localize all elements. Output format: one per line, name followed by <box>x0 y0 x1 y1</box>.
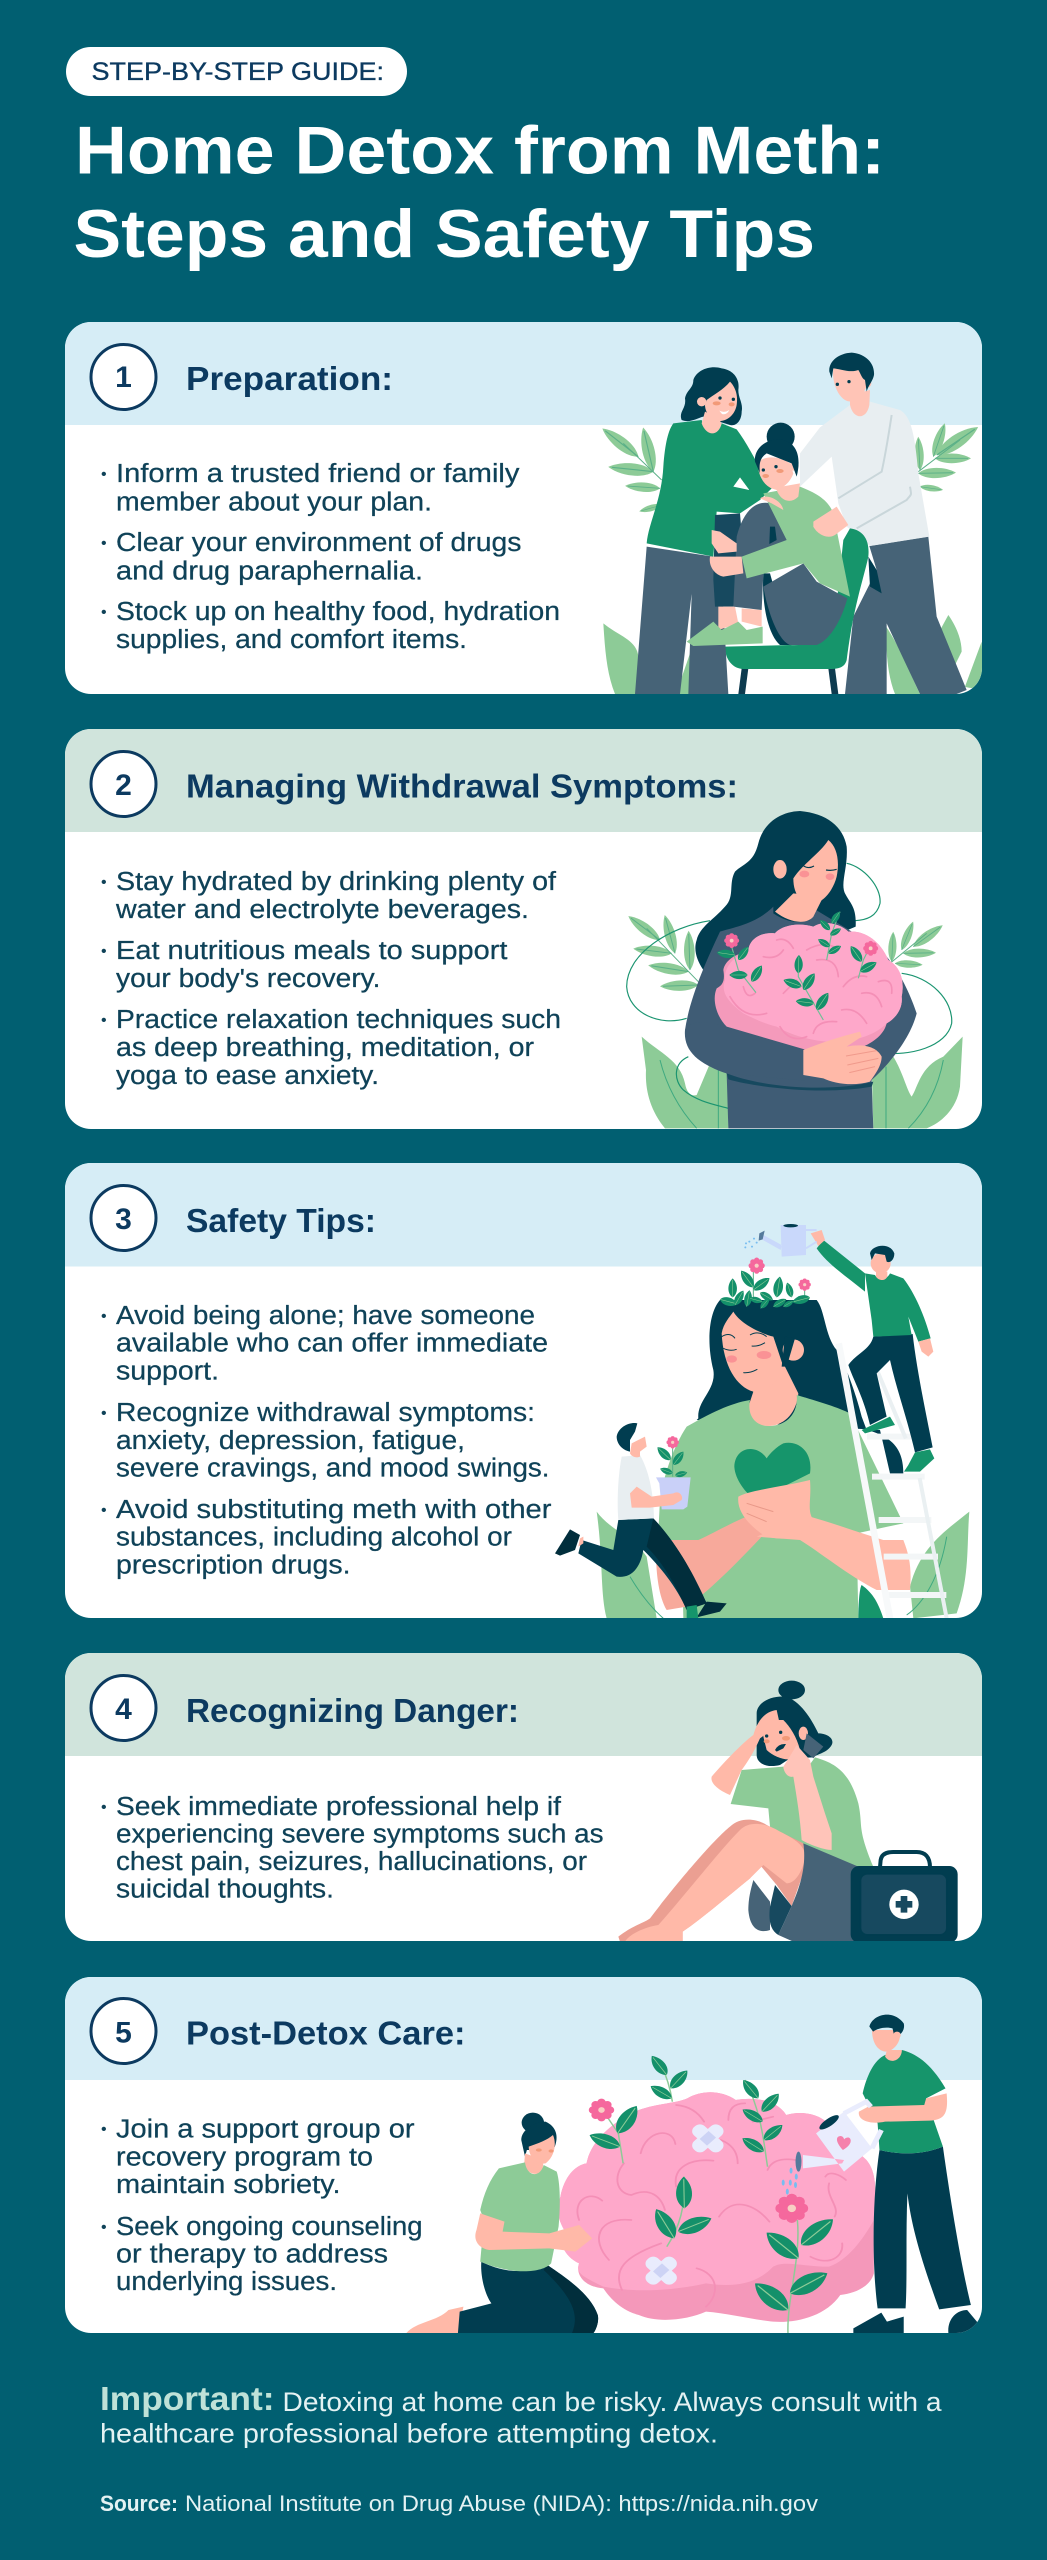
man <box>800 353 967 694</box>
kneeling woman <box>406 2113 598 2334</box>
bullet list: safety tips: substances, including alcohol or <box>116 1524 513 1552</box>
heading: post-detox care: Post-Detox Care: <box>186 2016 465 2052</box>
heading: managing withdrawal symptoms: Managing Withdrawal Symptoms: <box>186 768 738 806</box>
bullet list: preparation: supplies, and comfort items. <box>116 626 467 654</box>
bullet list: safety tips: support. <box>116 1358 219 1386</box>
watering can <box>782 2102 881 2195</box>
bullet list: safety tips: • <box>101 1405 107 1422</box>
woman left <box>635 367 772 694</box>
bullet list: withdrawal symptoms: yoga to ease anxiety. <box>116 1062 379 1090</box>
bullet list: withdrawal symptoms: • <box>101 943 107 960</box>
plants on brain <box>607 2065 798 2335</box>
number badge 5 <box>91 1998 156 2064</box>
brain <box>715 923 903 1050</box>
woman <box>656 1300 911 1618</box>
chair <box>692 528 882 694</box>
badge: step-by-step guide <box>66 47 407 96</box>
panel: step 2 managing withdrawal symptoms <box>65 729 982 1129</box>
bullet list: withdrawal symptoms: Practice relaxation techniques such <box>116 1006 561 1034</box>
illustration: two people tending a healing brain <box>406 2015 978 2335</box>
number badge 4: 4 <box>115 1693 132 1726</box>
important note: Detoxing at home can be risky. Always consult with a <box>282 2387 943 2417</box>
bullet list: post-detox care <box>101 2116 422 2296</box>
number badge 3: 3 <box>115 1203 132 1236</box>
bullet list: safety tips: anxiety, depression, fatigue, <box>116 1427 465 1455</box>
bullet list: withdrawal symptoms <box>101 868 561 1090</box>
bullet list: post-detox care: • <box>101 2219 107 2236</box>
arm and hand <box>685 1030 726 1074</box>
bullet list: post-detox care: Seek ongoing counseling <box>116 2213 422 2241</box>
bullet list: safety tips: • <box>101 1308 107 1325</box>
arms <box>711 1710 780 1795</box>
bullet list: safety tips: Recognize withdrawal symptoms: <box>116 1399 535 1427</box>
head plants <box>719 1258 811 1310</box>
title: Steps and Safety Tips <box>74 196 815 272</box>
panel: step 1 preparation <box>65 322 983 694</box>
brain <box>558 2053 875 2335</box>
bandages <box>643 2122 726 2287</box>
heading: preparation: Preparation: <box>186 361 393 398</box>
bullet list: danger signs: suicidal thoughts. <box>116 1876 334 1904</box>
heading: safety tips: Safety Tips: <box>186 1203 376 1240</box>
bullet list: preparation: • <box>101 604 107 621</box>
bullet list: danger signs: • <box>101 1799 107 1816</box>
ladder <box>839 1347 947 1618</box>
bullet list: safety tips: available who can offer immediate <box>116 1330 548 1358</box>
bullet list: preparation: Stock up on healthy food, hydration <box>116 598 560 626</box>
bullet list: withdrawal symptoms: Stay hydrated by drinking plenty of <box>116 868 557 896</box>
number badge 3 <box>91 1186 156 1250</box>
bullet list: preparation: Clear your environment of drugs <box>116 529 522 557</box>
hair and face <box>757 1681 832 1766</box>
bullet list: preparation: • <box>101 535 107 552</box>
man with flower pot <box>555 1423 727 1617</box>
watering can <box>744 1224 817 1257</box>
bullet list: danger signs: chest pain, seizures, hallucinations, or <box>116 1848 588 1876</box>
bullet list: post-detox care: underlying issues. <box>116 2268 337 2296</box>
illustration: woman with plants on her head, ladder and helpers <box>555 1224 969 1618</box>
badge: step-by-step guide: STEP-BY-STEP GUIDE: <box>92 58 384 86</box>
bullet list: safety tips: • <box>101 1502 107 1519</box>
panel: step 4 recognizing danger <box>65 1653 982 1943</box>
title <box>74 112 885 272</box>
panel: step 3 safety tips <box>65 1163 982 1618</box>
bullet list: post-detox care: maintain sobriety. <box>116 2171 340 2199</box>
bullet list: post-detox care: recovery program to <box>116 2144 373 2172</box>
title: Home Detox from Meth: <box>75 112 885 188</box>
bullet list: safety tips: Avoid being alone; have someone <box>116 1302 535 1330</box>
bullet list: post-detox care: Join a support group or <box>116 2116 415 2144</box>
number badge 1 <box>91 344 156 410</box>
face <box>775 893 823 922</box>
bullet list: danger signs: Seek immediate professional help if <box>116 1793 562 1821</box>
bullet list: post-detox care: or therapy to address <box>116 2240 388 2268</box>
bullet list: post-detox care: • <box>101 2121 107 2138</box>
number badge 1: 1 <box>115 361 132 394</box>
source: National Institute on Drug Abuse (NIDA): https://nida.nih.gov <box>185 2491 818 2516</box>
number badge 5: 5 <box>115 2016 132 2050</box>
bullet list: withdrawal symptoms: water and electrolyte beverages. <box>115 896 529 924</box>
important note: healthcare professional before attempting detox. <box>100 2418 718 2448</box>
seated woman <box>687 423 850 646</box>
heading: recognizing danger: Recognizing Danger: <box>186 1693 519 1730</box>
man on ladder <box>811 1230 934 1472</box>
important note <box>100 2380 943 2448</box>
bullet list: withdrawal symptoms: as deep breathing, meditation, or <box>116 1034 535 1062</box>
bullet list: safety tips: severe cravings, and mood swings. <box>116 1454 550 1482</box>
bullet list: withdrawal symptoms: • <box>101 874 107 891</box>
bullet list: preparation: and drug paraphernalia. <box>116 558 423 586</box>
man watering <box>853 2015 978 2334</box>
bullet list: safety tips <box>101 1302 552 1580</box>
body <box>685 907 917 1128</box>
important note: Important: <box>100 2380 274 2417</box>
bullet list: safety tips: Avoid substituting meth with other <box>116 1496 552 1524</box>
legs <box>748 1880 770 1931</box>
bullet list: preparation: member about your plan. <box>116 488 432 516</box>
illustration: distressed woman on phone with first aid kit <box>618 1681 958 1943</box>
bullet list: preparation: Inform a trusted friend or family <box>116 460 520 488</box>
shirt <box>731 1757 873 1867</box>
hair <box>695 811 856 970</box>
panel: step 5 post-detox care <box>65 1977 982 2335</box>
number badge 4 <box>91 1676 156 1740</box>
number badge 2 <box>91 752 156 816</box>
illustration: friends supporting a seated woman <box>599 353 983 694</box>
bullet list: withdrawal symptoms: Eat nutritious meals to support <box>116 937 508 965</box>
bullet list: danger signs <box>101 1793 604 1904</box>
bullet list: preparation: • <box>101 466 107 483</box>
bullet list: safety tips: prescription drugs. <box>116 1552 350 1580</box>
first aid kit <box>851 1852 958 1943</box>
source: Source: <box>100 2491 178 2516</box>
illustration: woman hugging a brain <box>625 811 963 1128</box>
bullet list: withdrawal symptoms: your body's recovery. <box>116 965 380 993</box>
bullet list: danger signs: experiencing severe symptoms such as <box>116 1820 604 1848</box>
number badge 2: 2 <box>115 769 132 802</box>
bullet list: preparation <box>101 460 560 654</box>
bullet list: withdrawal symptoms: • <box>101 1012 107 1029</box>
